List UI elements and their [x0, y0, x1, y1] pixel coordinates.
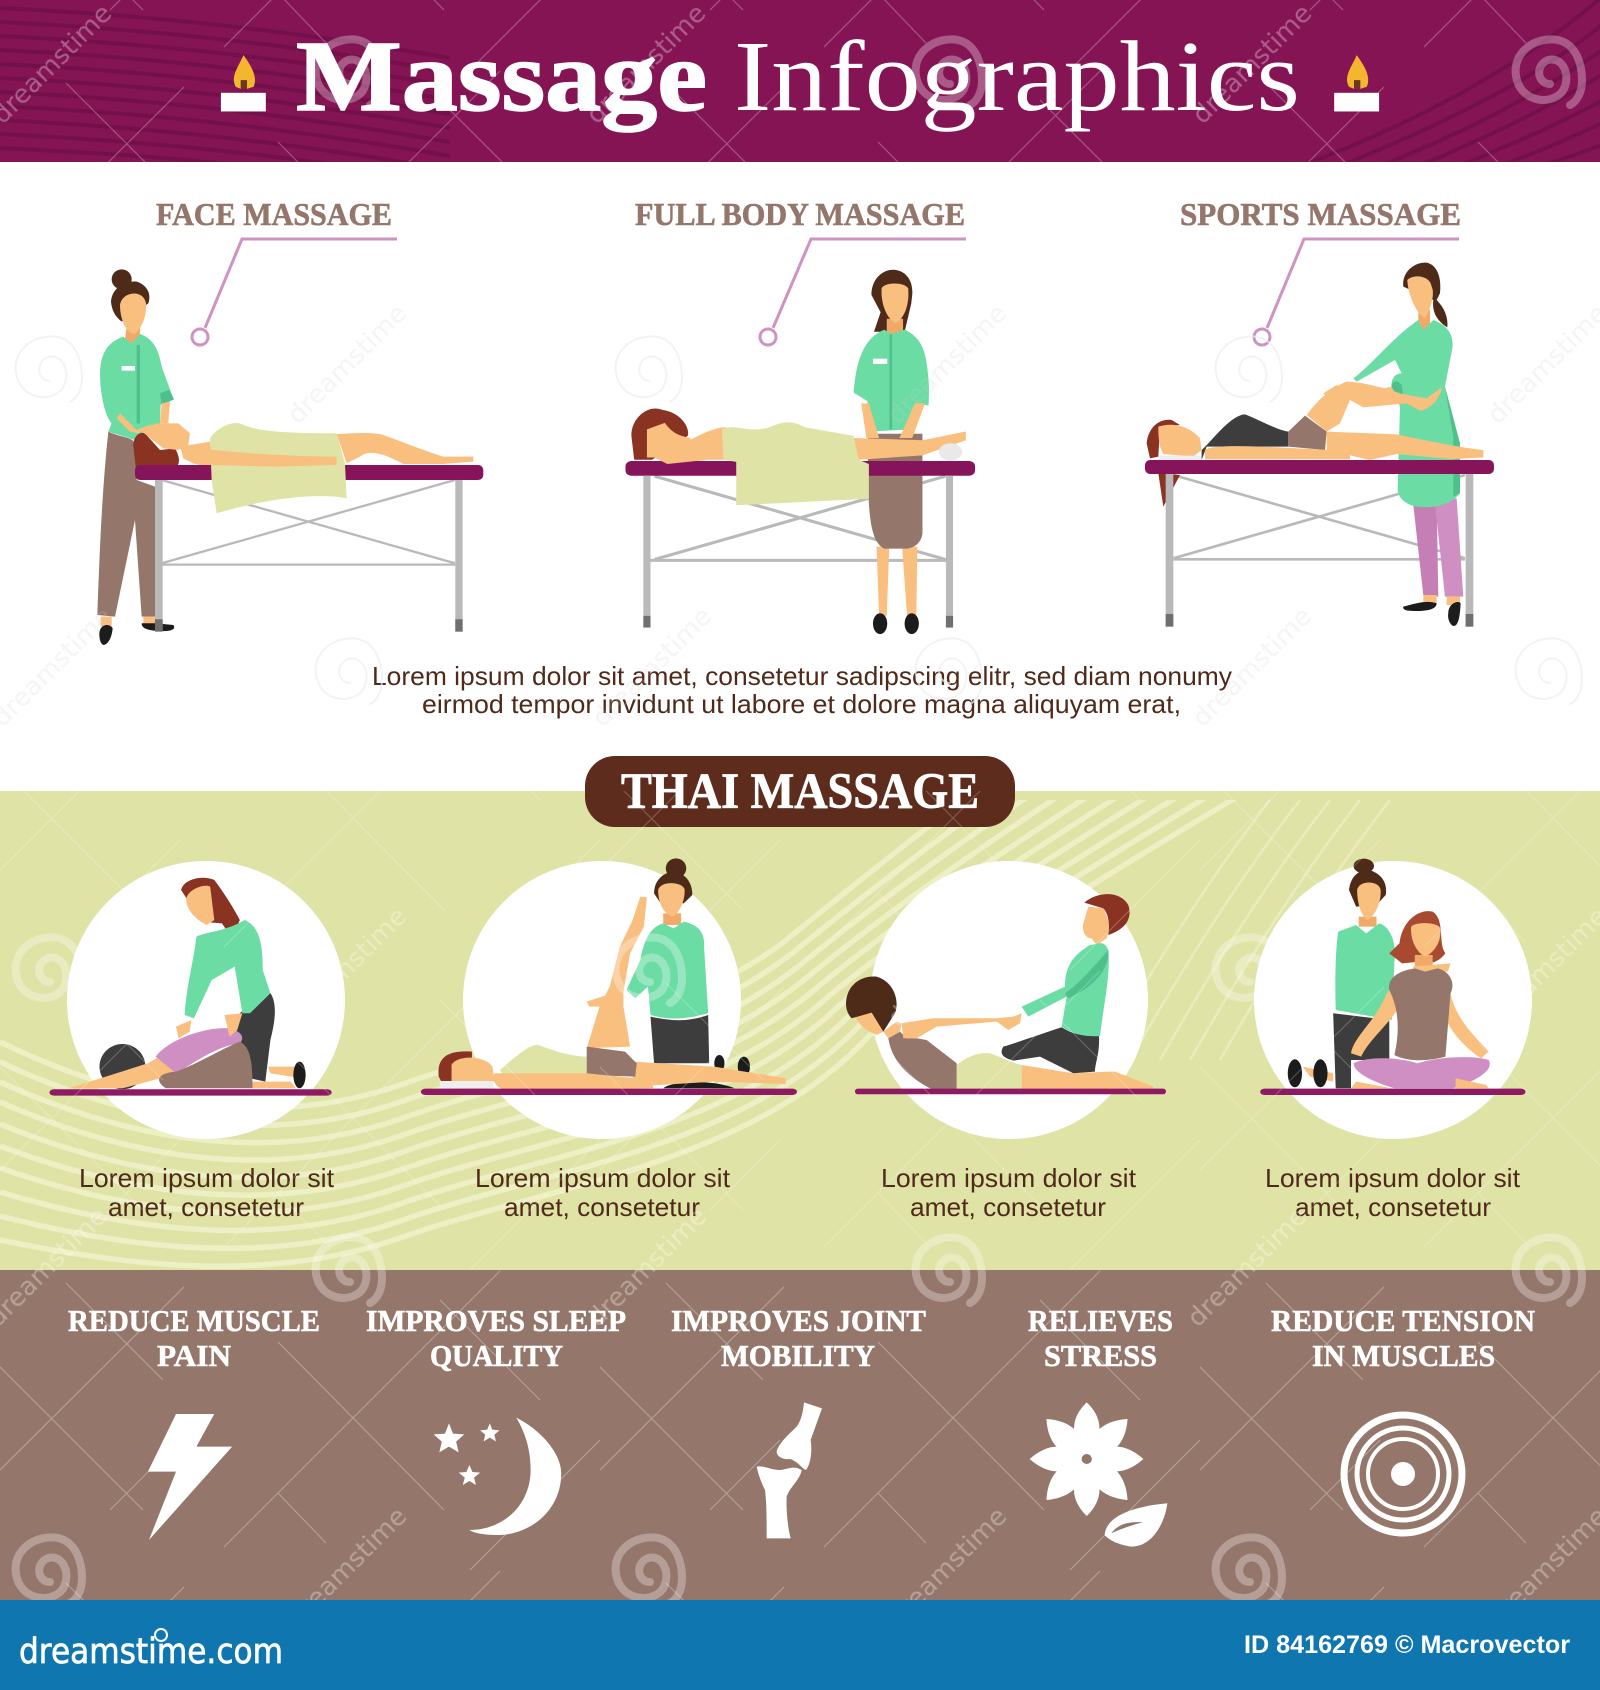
circle: thai pose 3: [870, 861, 1148, 1139]
icon: target rings: [1344, 1415, 1462, 1533]
decorative watermark overlay: dreamstime: [1187, 0, 1318, 130]
callout line: full body massage: [760, 239, 966, 345]
benefit heading: reduce muscle pain: PAIN: [157, 1338, 231, 1373]
title: Massage: Massage: [296, 20, 707, 132]
text block: intro: [372, 661, 1232, 719]
illustration: face massage on table: [97, 269, 483, 645]
caption: thai pose 4: amet, consetetur: [1295, 1192, 1491, 1222]
panel: benefits background: [0, 1270, 1600, 1600]
panel: footer bar: [0, 1600, 1600, 1690]
benefit heading: improves sleep quality: QUALITY: [430, 1338, 563, 1373]
heading: face massage: FACE MASSAGE: [156, 196, 392, 232]
icon: flower and leaf: [1030, 1402, 1167, 1547]
illustration: thai pose 1: [49, 878, 332, 1096]
text block: intro: Lorem ipsum dolor sit amet, consetetur sadipscing elitr, sed diam nonumy: [372, 661, 1232, 691]
decorative watermark overlay: dreamstime: [282, 902, 413, 1033]
benefit heading: reduce muscle pain: [68, 1303, 320, 1373]
caption: thai pose 3: [881, 1163, 1137, 1222]
benefit heading: improves sleep quality: IMPROVES SLEEP: [366, 1303, 626, 1338]
benefit heading: relieves stress: RELIEVES: [1028, 1303, 1173, 1338]
decorative watermark overlay: dreamstime: [1182, 1202, 1313, 1333]
decorative watermark overlay: dreamstime: [282, 1502, 413, 1633]
circle: thai pose 4: [1254, 861, 1532, 1139]
icon: knee joint: [757, 1402, 822, 1538]
benefit heading: reduce muscle pain: REDUCE MUSCLE: [68, 1303, 320, 1338]
caption: thai pose 2: [475, 1163, 731, 1222]
heading: full body massage: FULL BODY MASSAGE: [635, 196, 965, 232]
benefit heading: improves joint mobility: [671, 1303, 926, 1373]
icon: right candle: [1334, 55, 1379, 111]
caption: thai pose 1: amet, consetetur: [108, 1192, 304, 1222]
decorative watermark overlay: dreamstime: [282, 299, 413, 430]
benefit heading: relieves stress: [1028, 1303, 1173, 1373]
decorative watermark overlay: dreamstime: [1187, 602, 1318, 733]
panel: thai massage background: [0, 791, 1600, 1270]
benefit heading: relieves stress: STRESS: [1044, 1338, 1157, 1373]
heading: sports massage: SPORTS MASSAGE: [1180, 196, 1461, 232]
caption: thai pose 2: Lorem ipsum dolor sit: [475, 1163, 731, 1193]
caption: thai pose 1: Lorem ipsum dolor sit: [79, 1163, 335, 1193]
illustration: thai pose 4: [1260, 859, 1526, 1095]
illustration: thai pose 3: [846, 894, 1166, 1094]
decorative watermark overlay: dreamstime: [582, 1202, 713, 1333]
benefit heading: improves joint mobility: IMPROVES JOINT: [671, 1303, 926, 1338]
footer image credit: ID 84162769 © Macrovector: [1244, 1631, 1570, 1659]
caption: thai pose 3: amet, consetetur: [910, 1192, 1106, 1222]
illustration: thai pose 2: [421, 858, 797, 1095]
decorative watermark overlay: dreamstime: [581, 0, 712, 130]
circle: thai pose 2: [463, 861, 741, 1139]
benefit heading: reduce tension in muscles: IN MUSCLES: [1312, 1338, 1495, 1373]
decorative watermark overlay: dreamstime: [882, 1502, 1013, 1633]
icon: left candle: [221, 55, 266, 111]
callout line: face massage: [192, 239, 397, 345]
caption: thai pose 3: Lorem ipsum dolor sit: [881, 1163, 1137, 1193]
benefit heading: reduce tension in muscles: REDUCE TENSION: [1271, 1303, 1535, 1338]
icon: lightning bolt: [148, 1414, 232, 1540]
illustration: full body massage on table: [626, 270, 975, 634]
caption: thai pose 4: Lorem ipsum dolor sit: [1265, 1163, 1521, 1193]
caption: thai pose 4: [1265, 1163, 1521, 1222]
text block: intro: eirmod tempor invidunt ut labore et dolore magna aliquyam erat,: [422, 689, 1181, 719]
panel: thai massage pill heading: THAI MASSAGE: [621, 764, 979, 820]
benefit heading: improves joint mobility: MOBILITY: [721, 1338, 875, 1373]
footer logo text: dreamstime.com: [19, 1632, 283, 1672]
icon: moon and stars: [434, 1418, 561, 1535]
decorative watermark overlay: dreamstime: [882, 902, 1013, 1033]
benefit heading: improves sleep quality: [366, 1303, 626, 1373]
decorative watermark overlay: dreamstime: [587, 602, 718, 733]
panel: header banner: [0, 0, 1600, 178]
circle: thai pose 1: [67, 861, 345, 1139]
title: Infographics: Infographics: [734, 20, 1300, 132]
callout line: sports massage: [1254, 239, 1459, 345]
illustration: sports massage on table: [1145, 263, 1494, 627]
decorative watermark overlay: dreamstime: [882, 299, 1013, 430]
benefit heading: reduce tension in muscles: [1271, 1303, 1535, 1373]
caption: thai pose 1: [79, 1163, 335, 1222]
caption: thai pose 2: amet, consetetur: [504, 1192, 700, 1222]
